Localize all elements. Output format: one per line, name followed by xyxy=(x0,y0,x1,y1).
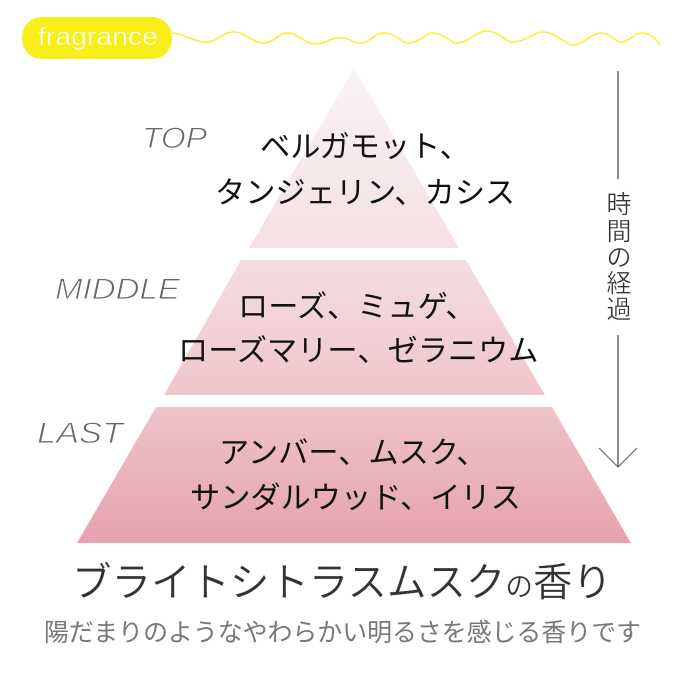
middle notes text: ローズマリー、ゼラニウム xyxy=(178,334,538,368)
middle notes text xyxy=(178,290,538,368)
label: MIDDLE: MIDDLE xyxy=(55,273,181,306)
title: ブライトシトラスムスクの香り xyxy=(72,561,612,605)
fragrance badge xyxy=(22,17,172,59)
top notes text xyxy=(215,131,515,210)
tier: last xyxy=(77,407,631,543)
vertical label: passage of time: 時 xyxy=(606,191,632,219)
label: TOP: TOP xyxy=(142,122,207,155)
vertical label: passage of time xyxy=(606,191,632,324)
pyramid xyxy=(77,68,631,543)
vertical label: passage of time: 過 xyxy=(606,296,632,324)
top notes text: ベルガモット、 xyxy=(260,131,470,164)
tier: middle xyxy=(164,260,545,395)
vertical label: passage of time: 間 xyxy=(606,218,632,246)
last notes text: サンダルウッド、イリス xyxy=(190,481,521,515)
middle notes text: ローズ、ミュゲ、 xyxy=(238,290,476,324)
top notes text: タンジェリン、カシス xyxy=(215,177,515,210)
fragrance badge: fragrance xyxy=(38,23,158,51)
last notes text xyxy=(190,437,521,515)
wavy yellow line xyxy=(172,31,660,45)
last notes text: アンバー、ムスク、 xyxy=(219,437,486,470)
vertical label: passage of time: の xyxy=(606,244,632,272)
label: LAST: LAST xyxy=(37,417,126,450)
subtitle: 陽だまりのようなやわらかい明るさを感じる香りです xyxy=(44,619,641,647)
time arrow xyxy=(599,71,637,467)
vertical label: passage of time: 経 xyxy=(606,270,632,298)
tier: top xyxy=(249,68,459,248)
